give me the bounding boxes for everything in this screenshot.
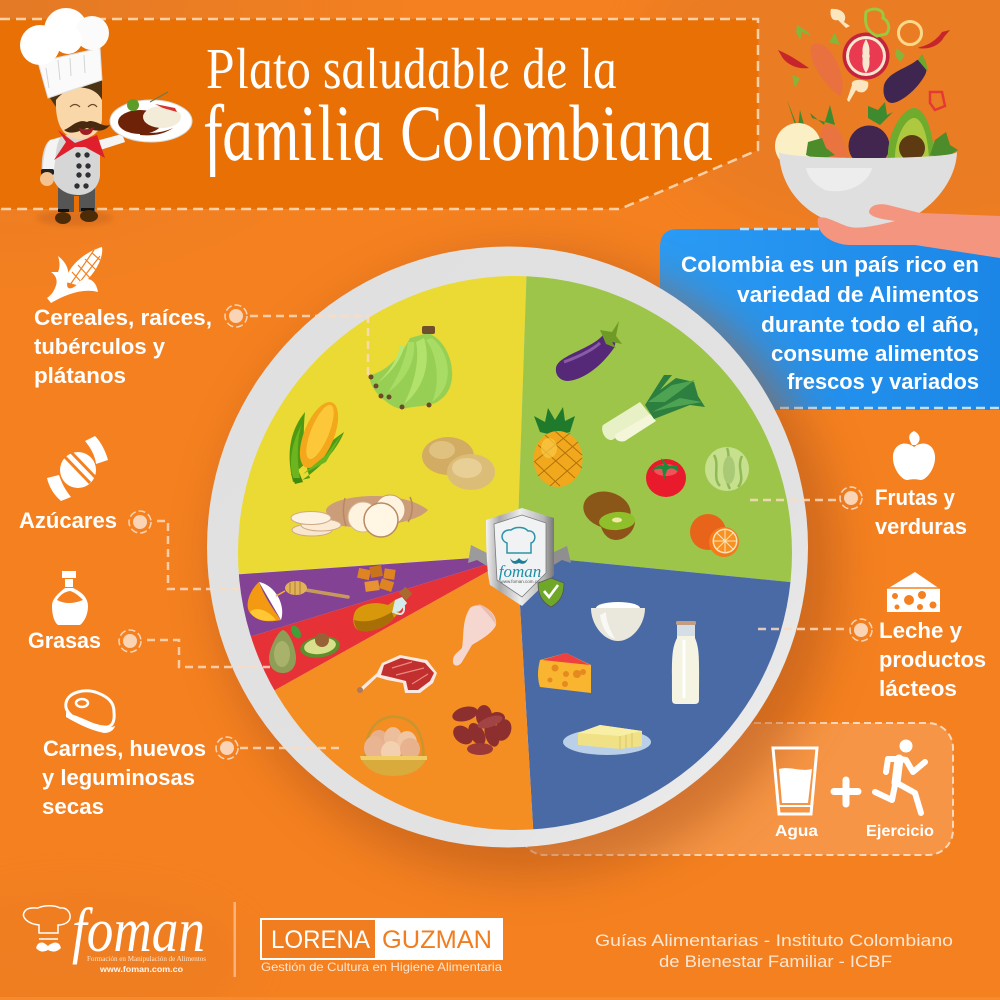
- lorena guzman logo: Gestión de Cultura en Higiene Alimentaria: [261, 960, 502, 974]
- lorena guzman logo: [260, 918, 503, 974]
- chef scarf: [54, 130, 105, 160]
- label: carnes: secas: [42, 794, 104, 819]
- food: meat cut: [357, 655, 437, 693]
- chef plate of food: [110, 92, 192, 142]
- food: corn: [290, 397, 346, 484]
- food: banana bunch: [368, 326, 452, 410]
- check badge: [538, 578, 564, 607]
- leader lines: [147, 316, 848, 748]
- plate shadow: [214, 254, 838, 878]
- hand: [818, 204, 1000, 258]
- section: sugars purple: [238, 558, 488, 636]
- lorena guzman logo: LORENA: [271, 926, 370, 954]
- label: frutas: Frutas y: [875, 485, 956, 510]
- icon: apple: [893, 431, 935, 480]
- flying vegetables: [778, 9, 950, 110]
- food: chicken drumstick: [453, 604, 496, 666]
- chef legs and shoes: [55, 188, 98, 224]
- section: meats orange: [274, 571, 534, 830]
- icon: plus: [834, 780, 858, 804]
- food: honey dipper: [276, 581, 348, 597]
- white bowl: [779, 152, 957, 228]
- label: cereales: tubérculos y: [34, 334, 166, 359]
- food: eggplant: [556, 321, 622, 381]
- section: dairy blue: [520, 560, 790, 830]
- carrot: [811, 43, 843, 96]
- tomato slice: [842, 32, 890, 80]
- header banner: [0, 19, 758, 209]
- food: potatoes: [422, 437, 495, 490]
- food: oil bottle: [353, 587, 412, 631]
- title: familia Colombiana: [197, 89, 719, 178]
- info callout text: consume alimentos: [771, 341, 979, 366]
- label: leche: [879, 618, 986, 701]
- food: orange: [690, 514, 739, 557]
- food: cassava: [291, 495, 428, 537]
- shield body: [486, 508, 554, 606]
- marker: azucares: [129, 511, 151, 533]
- info callout text: Colombia es un país rico en: [681, 252, 979, 277]
- source credit: [595, 931, 953, 971]
- bowl contents: [775, 100, 958, 169]
- foman wordmark: foman: [72, 897, 205, 965]
- label: azucares: Azúcares: [19, 508, 117, 533]
- section: fruits and vegetables green: [518, 276, 792, 582]
- plate rim: [207, 246, 808, 848]
- label: cereales: [34, 305, 212, 388]
- plate sections: [238, 276, 792, 830]
- info callout text: [681, 252, 979, 394]
- food: honey bowl: [248, 582, 282, 621]
- info callout text: durante todo el año,: [761, 312, 979, 337]
- label: carnes: Carnes, huevos: [43, 736, 206, 761]
- water and exercise panel background: [520, 723, 953, 855]
- chef head: [50, 80, 110, 139]
- title: [197, 36, 719, 178]
- foman url: www.foman.com.co: [99, 965, 183, 974]
- pepper and onion rings: [865, 9, 889, 36]
- green leaf sprigs: [792, 25, 905, 88]
- icon: runner: [875, 740, 925, 813]
- label: leche: productos: [879, 647, 986, 672]
- info callout text: variedad de Alimentos: [737, 282, 979, 307]
- marker: leche: [850, 619, 872, 641]
- title: Plato saludable de la: [200, 36, 621, 101]
- chef hat: [20, 8, 109, 98]
- food: leek: [602, 375, 705, 441]
- food: egg basket: [360, 717, 427, 776]
- logo word: foman: [499, 562, 541, 581]
- marker: frutas: [840, 487, 862, 509]
- logo url: www.foman.com.co: [500, 579, 540, 584]
- marker: carnes: [216, 737, 238, 759]
- label: cereales: Cereales, raíces,: [34, 305, 212, 330]
- info callout box: [660, 229, 1000, 410]
- icon: glass of water: [773, 748, 817, 814]
- foman logo: [23, 897, 206, 974]
- food: yogurt bowl: [591, 602, 645, 641]
- center shield logo: [468, 508, 571, 607]
- label: leche: lácteos: [879, 676, 957, 701]
- chef coat: [40, 134, 125, 195]
- salad bowl illustration: [775, 9, 1000, 258]
- label: frutas: [875, 485, 967, 539]
- icon: cheese: [886, 572, 940, 612]
- food: milk bottle: [672, 621, 699, 704]
- label: ejercicio: Ejercicio: [866, 823, 934, 840]
- footer divider: [234, 902, 236, 977]
- marker: cereales: [225, 305, 247, 327]
- foman tagline: Formación en Manipulación de Alimentos: [87, 954, 206, 963]
- food: butter on dish: [563, 725, 651, 755]
- label: agua: Agua: [775, 823, 818, 840]
- logo moustache: [510, 558, 528, 564]
- section: cereals yellow: [238, 276, 526, 574]
- marker: grasas: [119, 630, 141, 652]
- plate: [207, 246, 808, 848]
- foman hat icon: [23, 906, 70, 952]
- food: cabbage: [705, 447, 749, 491]
- source credit: Guías Alimentarias - Instituto Colombiano: [595, 931, 953, 950]
- food: kiwi: [579, 486, 636, 540]
- icon: oil bottle: [52, 571, 88, 625]
- food: cheese: [538, 653, 591, 693]
- red chilies: [778, 30, 950, 68]
- food: tomato: [646, 458, 686, 497]
- icon: candy: [47, 436, 108, 501]
- info callout text: frescos y variados: [787, 369, 979, 394]
- icon: corn: [47, 247, 102, 303]
- floating eggplant: [883, 54, 928, 103]
- label: carnes: y leguminosas: [42, 765, 195, 790]
- shield ribbons: [468, 545, 571, 566]
- label: leche: Leche y: [879, 618, 963, 643]
- label: grasas: Grasas: [28, 628, 101, 653]
- lorena guzman logo: GUZMAN: [382, 926, 492, 954]
- icon: steak: [66, 691, 115, 733]
- source credit: de Bienestar Familiar - ICBF: [659, 952, 892, 971]
- label: carnes: [42, 736, 206, 819]
- chef illustration: [20, 8, 192, 226]
- food: whole avocado and half: [269, 624, 341, 673]
- food: kidney beans: [449, 704, 514, 755]
- food: pineapple: [534, 407, 582, 487]
- label: cereales: plátanos: [34, 363, 126, 388]
- mushrooms: [831, 9, 868, 102]
- logo chef hat: [502, 527, 535, 553]
- section: fats red: [250, 564, 488, 690]
- food: caramels: [357, 565, 396, 592]
- label: frutas: verduras: [875, 514, 967, 539]
